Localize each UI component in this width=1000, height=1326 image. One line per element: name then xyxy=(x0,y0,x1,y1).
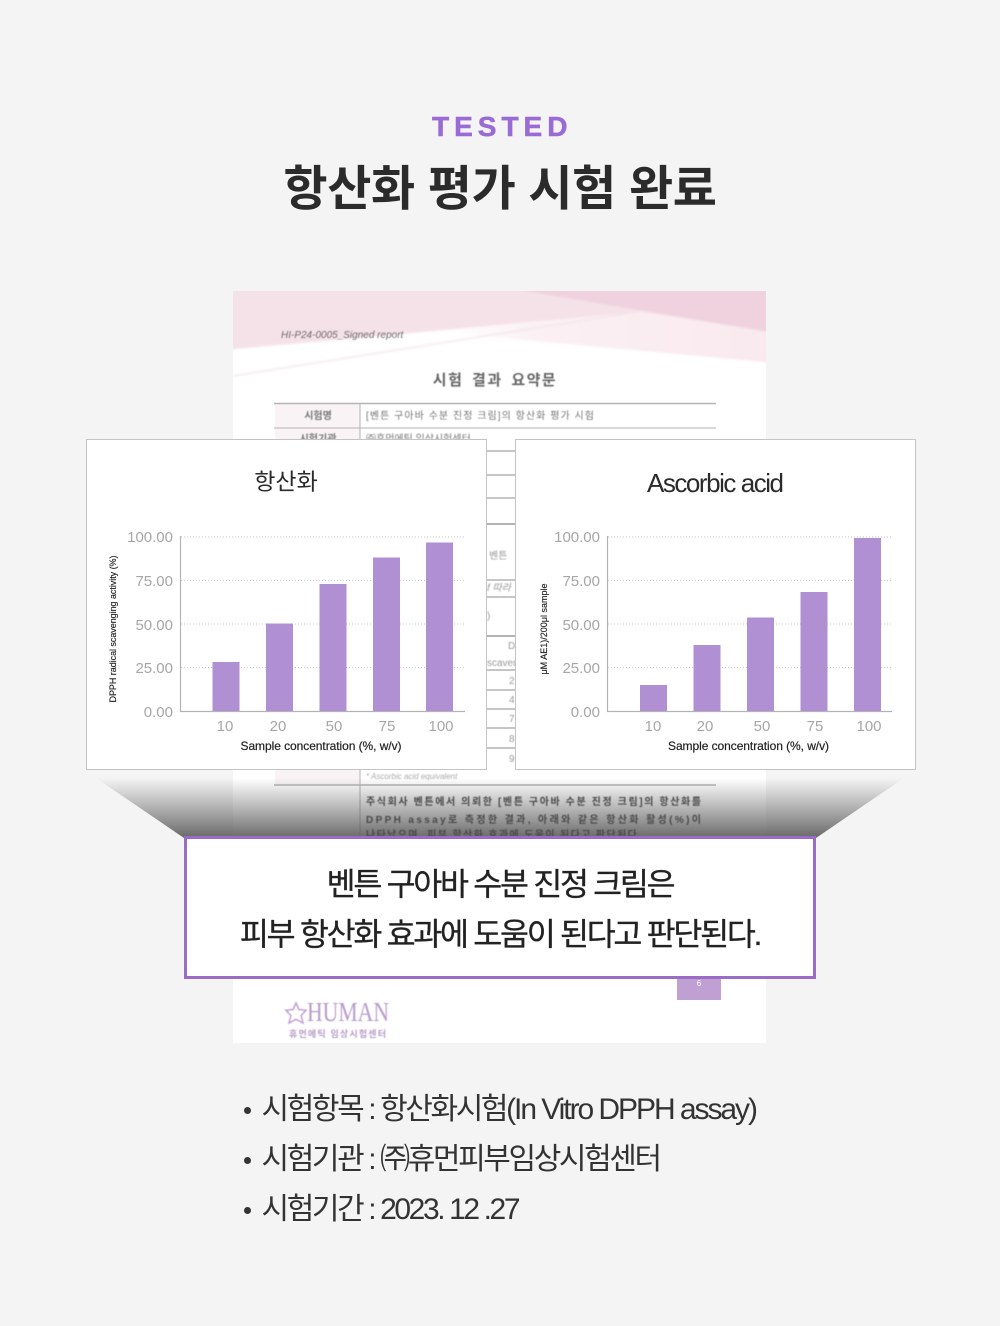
report table text: D xyxy=(508,641,515,652)
chart title: 항산화 xyxy=(254,468,318,494)
report table text: 7 xyxy=(509,714,515,725)
report summary text xyxy=(366,795,701,841)
report table text: 8 xyxy=(509,734,515,745)
report table text: 2 xyxy=(509,676,515,687)
bar chart: antioxidant: 100.00 xyxy=(127,529,173,546)
bar chart: ascorbic acid: 100.00 xyxy=(554,529,600,546)
report summary text: 주식회사 벤튼에서 의뢰한 [벤튼 구아바 수분 진정 크림]의 항산화를 xyxy=(366,795,701,808)
title: 항산화 평가 시험 완료 xyxy=(283,163,717,216)
bar chart: ascorbic acid: 50 xyxy=(754,718,770,735)
report table text: f 따라 xyxy=(487,582,513,594)
bar chart: ascorbic acid: 25.00 xyxy=(562,660,600,677)
report table text xyxy=(300,409,594,781)
icon: HUMAN logo xyxy=(286,997,389,1039)
bar chart: antioxidant: 20 xyxy=(270,718,286,735)
bar chart: ascorbic acid: 50.00 xyxy=(562,617,600,634)
bar chart: ascorbic acid: 75 xyxy=(807,718,823,735)
bar chart: ascorbic acid: 20 xyxy=(697,718,713,735)
text block: test details: 시험기관 : ㈜휴먼피부임상시험센터 xyxy=(262,1143,660,1176)
report table text: 시험기관 xyxy=(300,432,336,445)
bar chart: antioxidant xyxy=(108,468,465,753)
bar chart: antioxidant: 0.00 xyxy=(144,704,173,721)
bar chart: antioxidant: 50.00 xyxy=(135,617,173,634)
bar chart: ascorbic acid xyxy=(539,468,892,753)
icon: HUMAN logo: HUMAN xyxy=(307,997,389,1027)
eyebrow: TESTED: TESTED xyxy=(432,111,572,142)
bar chart: antioxidant: DPPH radical scavenging activity (%) xyxy=(108,556,118,702)
callout: conclusion: 피부 항산화 효과에 도움이 된다고 판단된다. xyxy=(240,916,760,952)
report table text: 벤튼 xyxy=(489,550,507,562)
callout: conclusion: 벤튼 구아바 수분 진정 크림은 xyxy=(327,866,673,902)
report table text: scaven xyxy=(487,658,519,669)
report table text: ㈜휴먼에틱 임상시험센터 xyxy=(366,432,471,445)
report code text: HI-P24-0005_Signed report xyxy=(281,330,405,341)
bar chart: ascorbic acid: μM AE1)/200μl sample xyxy=(539,584,549,674)
bar chart: ascorbic acid: 100 xyxy=(856,718,882,735)
bar chart: ascorbic acid: 10 xyxy=(645,718,661,735)
bar chart: antioxidant: Sample concentration (%, w/v) xyxy=(240,739,402,753)
text block: test details xyxy=(244,1093,756,1226)
chart title: Ascorbic acid xyxy=(647,468,784,498)
page number tab xyxy=(677,975,721,1000)
bar chart: antioxidant: 25.00 xyxy=(135,660,173,677)
report table text: 9 xyxy=(509,754,515,765)
funnel shadow xyxy=(96,778,904,838)
text block: test details: 시험기간 : 2023. 12 .27 xyxy=(262,1193,518,1226)
callout: conclusion xyxy=(184,836,816,979)
panel: background test report document xyxy=(102,291,898,1043)
report table text: * Ascorbic acid equivalent xyxy=(366,772,458,781)
report summary text: DPPH assay로 측정한 결과, 아래와 같은 항산화 활성(%)이 xyxy=(366,813,701,826)
report pink header xyxy=(225,285,775,376)
bar chart: ascorbic acid: Sample concentration (%, w/v) xyxy=(668,739,829,753)
report table text: 4 xyxy=(509,695,515,706)
report heading: 시험 결과 요약문 xyxy=(433,372,557,389)
bar chart: ascorbic acid: 75.00 xyxy=(562,573,600,590)
report table text: [벤튼 구아바 수분 진정 크림]의 항산화 평가 시험 xyxy=(366,410,594,422)
icon: HUMAN logo: 휴먼에틱 임상시험센터 xyxy=(289,1028,386,1039)
bar chart: antioxidant: 10 xyxy=(217,718,233,735)
text block: test details: 시험항목 : 항산화시험(In Vitro DPPH assay) xyxy=(262,1093,756,1126)
bar chart: antioxidant: 75.00 xyxy=(135,573,173,590)
report table text: ) xyxy=(487,611,490,622)
report table rows xyxy=(274,404,716,900)
bar chart: antioxidant: 100 xyxy=(428,718,454,735)
report table text: 시험명 xyxy=(304,409,332,422)
bar chart: antioxidant: 50 xyxy=(326,718,342,735)
panel: antioxidant chart xyxy=(86,439,487,770)
report summary text: 나타났으며, 피부 항산화 효과에 도움이 된다고 판단된다. xyxy=(366,828,641,841)
panel: ascorbic acid chart xyxy=(515,439,916,770)
bar chart: antioxidant: 75 xyxy=(379,718,395,735)
bar chart: ascorbic acid: 0.00 xyxy=(571,704,600,721)
page number tab: 6 xyxy=(697,979,702,988)
